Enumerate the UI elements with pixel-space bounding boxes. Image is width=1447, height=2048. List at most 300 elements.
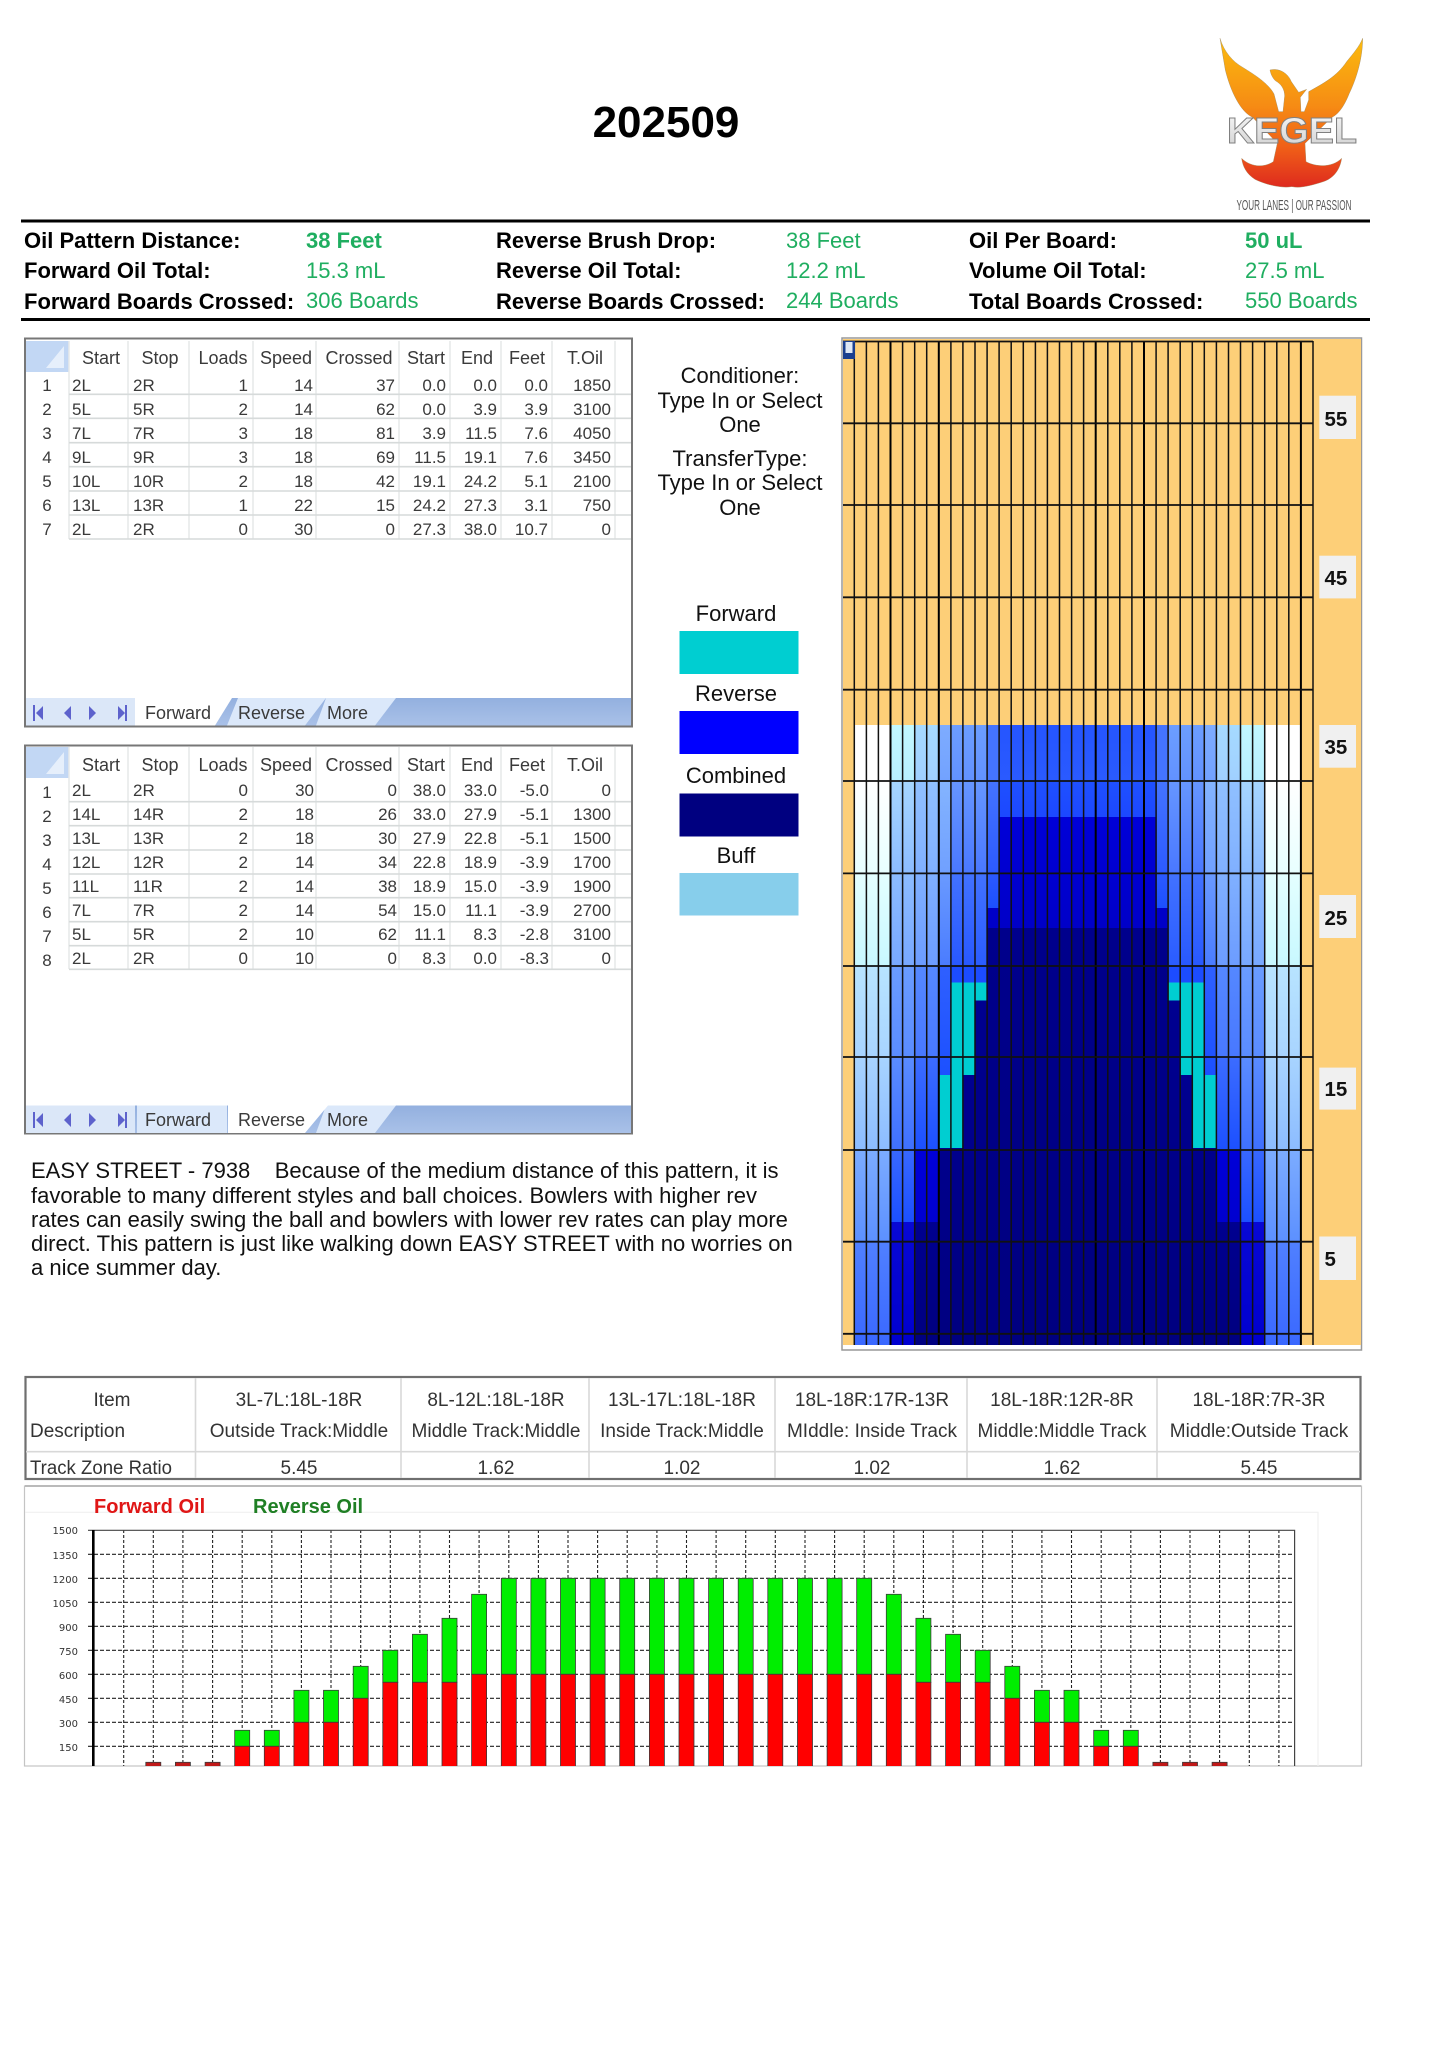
row 6: 13L	[72, 496, 100, 515]
row 4: 11.5	[414, 448, 446, 467]
row 2: 27.9	[464, 805, 497, 824]
stat column 1: Oil Pattern Distance:	[24, 228, 240, 253]
row: track zone ratio: 5.45	[281, 1458, 317, 1479]
icon: Kegel phoenix logo	[1220, 38, 1363, 214]
row: item: 13L-17L:18L-18R	[608, 1390, 756, 1411]
row 8: 0	[239, 949, 248, 968]
row 5: 18.9	[413, 877, 446, 896]
row: item: 18L-18R:12R-8R	[990, 1390, 1134, 1411]
sheet tabs: Reverse	[238, 1110, 305, 1130]
title: 202509	[593, 98, 739, 147]
row 6: 7R	[133, 901, 155, 920]
row 3: 7L	[72, 424, 91, 443]
row 8: 0.0	[473, 949, 497, 968]
row 2: 0.0	[422, 400, 446, 419]
row 4: 12L	[72, 853, 100, 872]
row 1: 33.0	[464, 781, 497, 800]
row 7: -2.8	[520, 925, 549, 944]
header row: End	[461, 348, 493, 368]
row 4: 34	[378, 853, 397, 872]
stat column 2: Reverse Oil Total:	[496, 258, 681, 283]
text block: pattern description: direct. This pattern is just like walking down EASY STREET with no worries on	[31, 1231, 793, 1256]
row 4: 69	[376, 448, 395, 467]
row: item: 3L-7L:18L-18R	[236, 1390, 362, 1411]
y axis labels: 1500	[53, 1526, 78, 1537]
row 4: 9L	[72, 448, 91, 467]
row 7: 7	[42, 520, 52, 539]
row 3: 3.9	[422, 424, 446, 443]
row 1: 1	[42, 376, 52, 395]
distance tag: 5: 5	[1324, 1248, 1336, 1271]
row 3: 3	[239, 424, 248, 443]
row 6: 6	[42, 496, 52, 515]
text block: pattern description: EASY STREET - 7938 Because of the medium distance of this pattern, it is	[31, 1158, 779, 1183]
panel: reverse table	[25, 746, 632, 1134]
distance tag: 35	[1319, 725, 1356, 768]
row 7: 8.3	[473, 925, 497, 944]
stat column 2	[496, 228, 899, 314]
row 7: 5R	[133, 925, 155, 944]
row 1: 38.0	[413, 781, 446, 800]
row 7: 0	[386, 520, 395, 539]
row 8: 0	[602, 949, 611, 968]
distance tag: 45	[1319, 556, 1356, 598]
row 1: 0	[602, 781, 611, 800]
row 1: 37	[376, 376, 395, 395]
row 5: 5	[42, 472, 52, 491]
row 5: 5.1	[524, 472, 548, 491]
header row: T.Oil	[567, 755, 603, 775]
row 4: -3.9	[520, 853, 549, 872]
row 5: 18	[294, 472, 313, 491]
row 5: 2100	[573, 472, 611, 491]
stat column 2: 244 Boards	[786, 288, 899, 313]
row 4	[42, 853, 611, 874]
stat column 3: Oil Per Board:	[969, 228, 1117, 253]
header row: End	[461, 755, 493, 775]
row: description: Outside Track:Middle	[210, 1421, 388, 1442]
distance tag: 25	[1319, 895, 1356, 938]
header row: Start	[407, 348, 445, 368]
header row: T.Oil	[567, 348, 603, 368]
y axis labels: 1200	[53, 1575, 78, 1586]
legend item: forward: Forward	[696, 601, 776, 626]
row 7: 7	[42, 927, 52, 946]
legend item: reverse: Reverse	[695, 681, 777, 706]
row 3: 1500	[573, 829, 611, 848]
header row: Crossed	[325, 755, 393, 775]
sheet tabs	[26, 1106, 631, 1133]
table corner	[26, 747, 69, 778]
stat column 1: Forward Boards Crossed:	[24, 289, 294, 314]
panel: lane oil pattern graph	[842, 338, 1362, 1350]
stat column 3	[969, 228, 1358, 314]
row: track zone ratio: 1.62	[1044, 1458, 1080, 1479]
row 3: 7R	[133, 424, 155, 443]
row 6: 13R	[133, 496, 164, 515]
text block: pattern description: a nice summer day.	[31, 1255, 221, 1280]
row 4: 4	[42, 448, 52, 467]
row: description: Description	[30, 1421, 125, 1442]
header row	[82, 348, 603, 368]
row 4: 12R	[133, 853, 164, 872]
row 7: 27.3	[413, 520, 446, 539]
row: track zone ratio: 1.62	[478, 1458, 514, 1479]
row 1: 30	[295, 781, 314, 800]
panel: track zone ratio table	[26, 1377, 1360, 1479]
row 1: 0	[239, 781, 248, 800]
chart legend	[94, 1496, 363, 1518]
row 2: 3.9	[524, 400, 548, 419]
row 3: 13R	[133, 829, 164, 848]
row 8: 2R	[133, 949, 155, 968]
distance tag: 35: 35	[1324, 736, 1347, 759]
row 6: 54	[378, 901, 397, 920]
row 3: 2	[239, 829, 248, 848]
row 7: 2R	[133, 520, 155, 539]
text block: pattern description	[31, 1158, 793, 1280]
row 5: 38	[378, 877, 397, 896]
row 2: 14	[294, 400, 313, 419]
row: item: 18L-18R:7R-3R	[1192, 1390, 1326, 1411]
text block: conditioner and transfer type: Type In or Select	[657, 388, 823, 413]
text block: pattern description: favorable to many different styles and ball choices. Bowlers with higher rev	[31, 1183, 757, 1208]
row 2: 2	[42, 400, 52, 419]
row 6: 24.2	[413, 496, 446, 515]
row 4: 1700	[573, 853, 611, 872]
row 4: 18	[294, 448, 313, 467]
row 2: 2	[42, 807, 52, 826]
row 7: 30	[294, 520, 313, 539]
row 4: 7.6	[524, 448, 548, 467]
row 6: 7L	[72, 901, 91, 920]
row 4: 18.9	[464, 853, 497, 872]
row 3: 18	[295, 829, 314, 848]
header row	[82, 755, 603, 775]
row 2: 18	[295, 805, 314, 824]
row 5: 11R	[133, 877, 163, 896]
row 7: 10	[295, 925, 314, 944]
row 2: 5L	[72, 400, 91, 419]
row 7: 2	[239, 925, 248, 944]
text block: pattern description: rates can easily swing the ball and bowlers with lower rev rates can play more	[31, 1207, 788, 1232]
row 4: 22.8	[413, 853, 446, 872]
row 3: 30	[378, 829, 397, 848]
legend item: reverse	[680, 681, 798, 754]
row 1: 2L	[72, 781, 91, 800]
row: description: Middle:Middle Track	[978, 1421, 1147, 1442]
stat column 2: 12.2 mL	[786, 258, 866, 283]
row 6: 750	[583, 496, 611, 515]
row 6: 6	[42, 903, 52, 922]
row 7	[42, 520, 611, 539]
row 7: 3100	[573, 925, 611, 944]
row 1: 14	[294, 376, 313, 395]
row 5: 10R	[133, 472, 164, 491]
row 2: 26	[378, 805, 397, 824]
tagline: YOUR LANES | OUR PASSION	[1236, 197, 1352, 214]
row 1	[42, 781, 611, 802]
header row: Start	[407, 755, 445, 775]
row 1: 2R	[133, 781, 155, 800]
statistics block	[21, 220, 1370, 321]
stat column 3: Total Boards Crossed:	[969, 289, 1203, 314]
row 5: 19.1	[413, 472, 446, 491]
row 4: 3450	[573, 448, 611, 467]
text block: conditioner and transfer type: Conditioner:	[681, 363, 799, 388]
text block: conditioner and transfer type: TransferType:	[673, 446, 807, 471]
row 1	[42, 376, 611, 395]
row 2: -5.1	[520, 805, 549, 824]
distance tag: 5	[1319, 1236, 1356, 1280]
distance tag: 55	[1319, 396, 1356, 439]
row 7: 38.0	[464, 520, 497, 539]
row 5: -3.9	[520, 877, 549, 896]
sheet tabs: Forward	[145, 1110, 211, 1130]
row 1: 0	[388, 781, 397, 800]
text block: conditioner and transfer type: Type In or Select	[657, 470, 823, 495]
y axis labels: 1050	[53, 1599, 78, 1610]
stat column 1	[24, 228, 419, 314]
y axis labels: 750	[59, 1647, 78, 1658]
row 5: 5	[42, 879, 52, 898]
y axis labels: 900	[59, 1623, 78, 1634]
row 5	[42, 877, 611, 898]
row 2	[42, 805, 611, 826]
row 5: 1900	[573, 877, 611, 896]
row: track zone ratio: Track Zone Ratio	[30, 1458, 172, 1479]
row 6: 2700	[573, 901, 611, 920]
row 3: 13L	[72, 829, 100, 848]
distance tag: 55: 55	[1324, 408, 1347, 431]
row 4: 14	[295, 853, 314, 872]
row 6	[42, 901, 611, 922]
row 5: 15.0	[464, 877, 497, 896]
sheet tabs	[26, 698, 631, 726]
row 6: -3.9	[520, 901, 549, 920]
row 4	[42, 448, 611, 467]
row 3: 22.8	[464, 829, 497, 848]
stat column 2: Reverse Boards Crossed:	[496, 289, 765, 314]
row 6: 15	[376, 496, 395, 515]
header row: Start	[82, 755, 120, 775]
row 6: 15.0	[413, 901, 446, 920]
row 3: -5.1	[520, 829, 549, 848]
stat column 1: Forward Oil Total:	[24, 258, 211, 283]
row 3: 4050	[573, 424, 611, 443]
legend item: forward	[680, 601, 798, 674]
row 8: 8	[42, 951, 52, 970]
row 1: 2L	[72, 376, 91, 395]
row 2: 3.9	[473, 400, 497, 419]
row 5: 14	[295, 877, 314, 896]
row 3: 7.6	[524, 424, 548, 443]
row: item: 18L-18R:17R-13R	[795, 1390, 949, 1411]
y axis labels: 150	[59, 1743, 78, 1754]
row 7: 5L	[72, 925, 91, 944]
row 4: 19.1	[464, 448, 497, 467]
row 3	[42, 829, 611, 850]
row 3: 3	[42, 424, 52, 443]
row 2: 62	[376, 400, 395, 419]
stat column 3: 27.5 mL	[1245, 258, 1324, 283]
panel: forward table	[25, 338, 632, 726]
row 8: -8.3	[520, 949, 549, 968]
row: description	[30, 1421, 1349, 1442]
row 5: 11L	[72, 877, 99, 896]
row 7: 11.1	[414, 925, 446, 944]
row: track zone ratio	[30, 1458, 1277, 1479]
row 5: 10L	[72, 472, 100, 491]
row 5	[42, 472, 611, 491]
stat column 2: 38 Feet	[786, 228, 861, 253]
stat column 3: Volume Oil Total:	[969, 258, 1147, 283]
oil distribution cells	[854, 725, 1301, 1345]
stat column 1: 15.3 mL	[306, 258, 386, 283]
row 3: 27.9	[413, 829, 446, 848]
row 7	[42, 925, 611, 946]
row 5: 42	[376, 472, 395, 491]
row 2: 3100	[573, 400, 611, 419]
header row: Stop	[141, 348, 179, 368]
header row: Loads	[198, 348, 248, 368]
phoenix silhouette	[1220, 38, 1363, 187]
row 1: 1850	[573, 376, 611, 395]
wordmark: KEGEL	[1227, 110, 1357, 151]
row 2: 14R	[133, 805, 164, 824]
forward oil bars	[146, 1674, 1227, 1770]
distance tag: 45: 45	[1324, 567, 1347, 590]
legend item: combined	[680, 763, 798, 836]
y axis labels: 1350	[53, 1551, 78, 1562]
stat column 3: 550 Boards	[1245, 288, 1358, 313]
row 3	[42, 424, 611, 443]
row 5: 2	[239, 472, 248, 491]
row: track zone ratio: 5.45	[1241, 1458, 1277, 1479]
row: description: Middle Track:Middle	[412, 1421, 580, 1442]
sheet tabs: Reverse	[238, 703, 305, 723]
row 7: 0	[239, 520, 248, 539]
stat column 1: 306 Boards	[306, 288, 419, 313]
stat column 1: 38 Feet	[306, 228, 382, 253]
legend item: combined: Combined	[686, 763, 786, 788]
text block: conditioner and transfer type: One	[719, 495, 761, 520]
legend item: buff: Buff	[717, 843, 756, 868]
sheet tabs: More	[327, 703, 368, 723]
row 6: 14	[295, 901, 314, 920]
row 2	[42, 400, 611, 419]
row 2: 5R	[133, 400, 155, 419]
row: description: Middle:Outside Track	[1170, 1421, 1349, 1442]
row 1: 0.0	[473, 376, 497, 395]
header row: Feet	[509, 348, 545, 368]
row 2: 2	[239, 400, 248, 419]
row 3: 11.5	[465, 424, 497, 443]
row 6: 11.1	[465, 901, 497, 920]
table corner	[26, 341, 69, 372]
row 7: 0	[602, 520, 611, 539]
row: description: MIddle: Inside Track	[787, 1421, 958, 1442]
header row: Start	[82, 348, 120, 368]
distance tag: 15	[1319, 1068, 1356, 1110]
legend	[680, 601, 798, 916]
row 6: 3.1	[524, 496, 548, 515]
chart legend: Reverse Oil	[253, 1496, 363, 1518]
panel: oil distribution bar chart	[24, 1486, 1362, 1770]
row 1: 0.0	[422, 376, 446, 395]
reverse oil bars	[235, 1578, 1138, 1746]
text block: conditioner and transfer type	[657, 363, 823, 520]
row 7: 62	[378, 925, 397, 944]
y axis labels: 600	[59, 1671, 78, 1682]
row 8: 0	[388, 949, 397, 968]
sheet tabs: Forward	[145, 703, 211, 723]
row 6: 2	[239, 901, 248, 920]
row 7: 10.7	[515, 520, 548, 539]
row 2: 33.0	[413, 805, 446, 824]
row 3: 18	[294, 424, 313, 443]
row: description: Inside Track:Middle	[600, 1421, 764, 1442]
row 5: 2	[239, 877, 248, 896]
row 4: 9R	[133, 448, 155, 467]
row: item: 8L-12L:18L-18R	[427, 1390, 565, 1411]
row 8	[42, 949, 611, 970]
row 4: 2	[239, 853, 248, 872]
text block: conditioner and transfer type: One	[719, 412, 761, 437]
row 6	[42, 496, 611, 515]
header row: Stop	[141, 755, 179, 775]
legend item: buff	[680, 843, 798, 916]
distance tag: 15: 15	[1324, 1078, 1347, 1101]
row 4: 4	[42, 855, 52, 874]
header row: Speed	[260, 348, 312, 368]
row 6: 27.3	[464, 496, 497, 515]
row 1: -5.0	[520, 781, 549, 800]
sheet tabs: More	[327, 1110, 368, 1130]
row 5: 24.2	[464, 472, 497, 491]
y axis labels: 450	[59, 1695, 78, 1706]
row 3: 81	[376, 424, 395, 443]
row 8: 2L	[72, 949, 91, 968]
row 2: 2	[239, 805, 248, 824]
header row: Crossed	[325, 348, 393, 368]
y axis labels	[53, 1526, 78, 1754]
row 1: 1	[42, 783, 52, 802]
row 6: 22	[294, 496, 313, 515]
row 2: 14L	[72, 805, 100, 824]
row: track zone ratio: 1.02	[854, 1458, 890, 1479]
header row: Loads	[198, 755, 248, 775]
row 2: 1300	[573, 805, 611, 824]
row: item: Item	[94, 1390, 130, 1411]
row 6: 1	[239, 496, 248, 515]
row 8: 8.3	[422, 949, 446, 968]
y axis labels: 300	[59, 1719, 78, 1730]
header row: Speed	[260, 755, 312, 775]
row 8: 10	[295, 949, 314, 968]
chart legend: Forward Oil	[94, 1496, 205, 1518]
stat column 2: Reverse Brush Drop:	[496, 228, 716, 253]
row 4: 3	[239, 448, 248, 467]
stat column 3: 50 uL	[1245, 228, 1302, 253]
row 1: 1	[239, 376, 248, 395]
row: track zone ratio: 1.02	[664, 1458, 700, 1479]
row 1: 2R	[133, 376, 155, 395]
row 7: 2L	[72, 520, 91, 539]
row 1: 0.0	[524, 376, 548, 395]
selection handle	[843, 341, 855, 359]
row 3: 3	[42, 831, 52, 850]
